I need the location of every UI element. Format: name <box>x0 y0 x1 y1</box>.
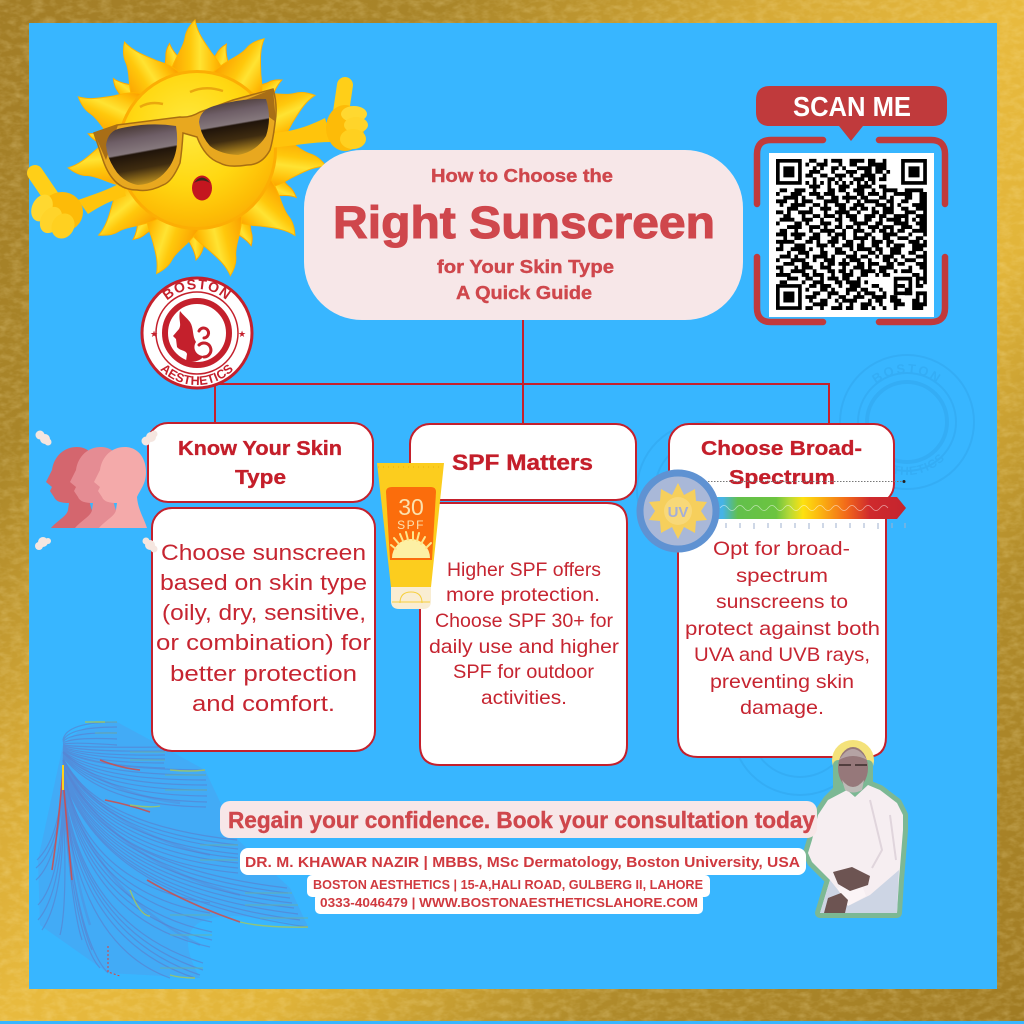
QR code <box>769 153 934 317</box>
title pill: for Your Skin Type <box>437 256 614 277</box>
card 1 body <box>152 508 375 751</box>
logo face silhouette <box>173 311 211 362</box>
UV sun badge <box>640 473 716 549</box>
right arm and thumbs-up hand <box>270 85 368 151</box>
left arm and thumbs-up hand <box>27 173 126 243</box>
watermark logos: BOSTON <box>872 364 940 382</box>
halo <box>832 740 874 780</box>
card 1 body: (oily, dry, sensitive, <box>162 600 366 625</box>
card 3 body: sunscreens to <box>716 591 848 613</box>
card 2: SPF Matters <box>410 424 636 765</box>
card 1 body: or combination) for <box>156 630 372 655</box>
Boston Aesthetics logo badge: ★ <box>150 329 158 339</box>
kurta <box>808 785 903 913</box>
sun rays <box>65 20 330 283</box>
icon: SPF 30 sunscreen tube: SPF <box>397 518 425 532</box>
icon: UV index spectrum bar <box>640 473 906 549</box>
clinic address line: BOSTON AESTHETICS | 15-A,HALI ROAD, GULBERG II, LAHORE <box>313 878 703 892</box>
card 1 body: based on skin type <box>160 570 367 595</box>
card 3 body: UVA and UVB rays, <box>694 644 870 666</box>
sleeve and hands <box>837 880 866 906</box>
Boston Aesthetics logo badge: AESTHETICS <box>160 364 232 385</box>
sun mascot with sunglasses <box>27 20 368 283</box>
QR corner brackets <box>757 140 945 322</box>
card 3 header: Choose Broad- <box>701 437 862 460</box>
UV sun badge: UV <box>668 504 688 521</box>
mouth <box>192 176 212 200</box>
Boston Aesthetics logo badge: ★ <box>238 329 246 339</box>
clinic address line <box>307 875 710 897</box>
watermark logos: AESTHETICS <box>895 454 944 475</box>
sunglasses <box>94 89 276 190</box>
card 3 header: Spectrum <box>729 466 835 489</box>
card 1 header: Type <box>235 466 286 489</box>
scan me QR block <box>756 86 947 322</box>
connector lines <box>205 320 829 424</box>
watermark logos <box>636 354 975 796</box>
contact line <box>315 893 703 914</box>
Boston Aesthetics logo badge <box>140 276 254 390</box>
Boston Aesthetics logo badge: BOSTON <box>162 280 231 300</box>
decorative blue fan of fine lines <box>36 722 308 978</box>
card 1 body: Choose sunscreen <box>161 540 366 565</box>
scan me speech label <box>756 86 947 141</box>
card 3 header <box>669 424 894 504</box>
card 2 body: Choose SPF 30+ for <box>435 611 614 632</box>
card 1 body: better protection <box>170 661 357 686</box>
icon: overlapping head silhouettes <box>35 430 158 552</box>
card 1 body: and comfort. <box>192 691 335 716</box>
doctor credentials line <box>240 848 806 875</box>
icon: SPF 30 sunscreen tube: 30 <box>398 494 424 520</box>
title pill: A Quick Guide <box>456 282 592 303</box>
sun face <box>120 73 274 227</box>
scan me speech label: SCAN ME <box>793 91 911 122</box>
card 1: Know Your Skin Type <box>148 423 375 751</box>
card 2 body: SPF for outdoor <box>453 662 595 683</box>
title pill: How to Choose the <box>431 165 613 186</box>
card 3 body <box>678 505 886 757</box>
icon: SPF 30 sunscreen tube <box>377 463 444 609</box>
call to action pill: Regain your confidence. Book your consultation today <box>228 807 815 833</box>
head <box>838 747 868 789</box>
card 2 body: daily use and higher <box>429 637 620 658</box>
card 3 body: Opt for broad- <box>713 538 850 560</box>
title pill <box>304 150 743 320</box>
card 2 body: activities. <box>481 688 567 709</box>
contact line: 0333-4046479 | WWW.BOSTONAESTHETICSLAHORE.COM <box>320 896 698 910</box>
title pill: Right Sunscreen <box>333 197 715 248</box>
card 2 header <box>410 424 636 500</box>
doctor portrait <box>808 740 903 913</box>
card 1 header <box>148 423 373 502</box>
card 2 body: more protection. <box>446 585 600 606</box>
card 2 header: SPF Matters <box>452 450 593 475</box>
card 3 body: preventing skin <box>710 671 854 693</box>
call to action pill <box>220 801 817 838</box>
card 2 body: Higher SPF offers <box>447 560 601 581</box>
doctor credentials line: DR. M. KHAWAR NAZIR | MBBS, MSc Dermatology, Boston University, USA <box>245 855 801 871</box>
card 3: Choose Broad-Spectrum <box>669 424 894 757</box>
card 2 body <box>420 503 627 765</box>
card 3 body: damage. <box>740 697 824 719</box>
card 1 header: Know Your Skin <box>178 437 342 460</box>
green outline <box>808 765 903 913</box>
card 3 body: spectrum <box>736 565 828 587</box>
eyebrows <box>140 88 223 107</box>
card 3 body: protect against both <box>685 618 880 640</box>
